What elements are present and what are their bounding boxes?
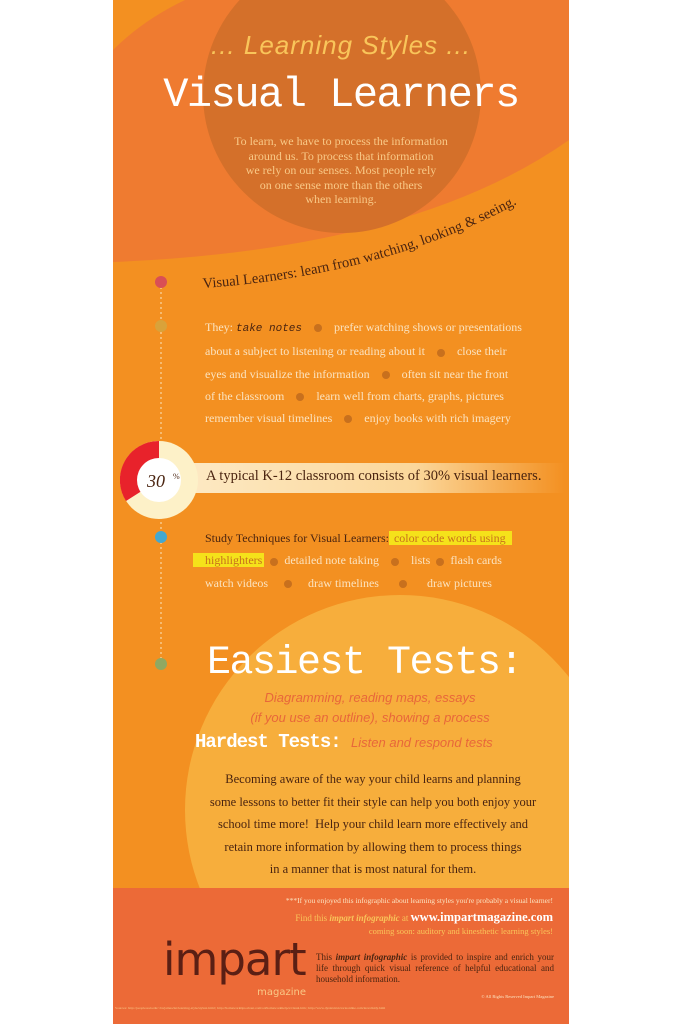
study techniques: watch videos draw timelines draw pictures xyxy=(205,576,492,590)
study techniques xyxy=(193,531,512,590)
list: they xyxy=(205,320,522,425)
text: © All Rights Reserved Impart Magazine xyxy=(481,994,554,999)
text: coming soon: auditory and kinesthetic learning styles! xyxy=(369,926,553,936)
list: they: of the classroom learn well from charts, graphs, pictures xyxy=(205,389,504,403)
donut 30%: 30 xyxy=(146,471,165,491)
easiest tests text: (if you use an outline), showing a process xyxy=(250,710,490,725)
heading: Easiest Tests: Easiest Tests: xyxy=(207,641,522,686)
logo: impart magazine: impart xyxy=(163,933,306,986)
closing paragraph: retain more information by allowing them to process things xyxy=(224,840,522,854)
intro text xyxy=(234,134,448,206)
list: they: eyes and visualize the information often sit near the front xyxy=(205,367,508,381)
logo: impart magazine: magazine xyxy=(257,987,306,998)
timeline dot gold xyxy=(155,320,167,332)
stat bar xyxy=(190,463,565,493)
background panel xyxy=(113,0,569,1024)
intro text: around us. To process that information xyxy=(249,148,433,162)
sources: Sources: http://people.usd.edu/~bwjames/tut/learning-style/stylest.html | http://homeworktips.about.com/od/homeworkhelp/a/visual.htm | http://www.dyslexiavictoriaonline.com/lesvolkidy.html xyxy=(115,1006,385,1010)
closing paragraph: school time more! Help your child learn more effectively and xyxy=(218,817,528,831)
intro text: To learn, we have to process the information xyxy=(234,134,448,148)
text: Find this impart infographic at www.impartmagazine.com xyxy=(295,910,553,924)
intro text: when learning. xyxy=(305,192,377,206)
timeline dot green xyxy=(155,658,167,670)
easiest tests text xyxy=(250,690,490,725)
title: Learning Styles: ... Learning Styles ... xyxy=(211,30,471,60)
heading: Visual Learners: Visual Learners xyxy=(163,71,519,119)
donut 30% xyxy=(120,441,198,519)
hardest tests: Hardest Tests: Listen and respond tests xyxy=(195,731,493,753)
footer description: This impart infographic is provided to inspire and enrich your life through quick visual reference of helpful educational and household information. xyxy=(316,952,554,984)
timeline dot red xyxy=(155,276,167,288)
intro text: we rely on our senses. Most people rely xyxy=(246,163,436,177)
intro text: on one sense more than the others xyxy=(260,178,422,192)
curved tagline: Visual Learners: learn from watching, looking & seeing. xyxy=(202,199,516,288)
study techniques: Study Techniques for Visual Learners: color code words using xyxy=(205,531,506,545)
text: A typical K-12 classroom consists of 30% visual learners. xyxy=(206,468,541,484)
list: they: They: take notes prefer watching shows or presentations xyxy=(205,320,522,335)
easiest tests text: Diagramming, reading maps, essays xyxy=(264,690,475,705)
list: they: remember visual timelines enjoy books with rich imagery xyxy=(205,411,511,425)
study techniques: highlighters detailed note taking lists flash cards xyxy=(205,553,502,567)
list: they: about a subject to listening or reading about it close their xyxy=(205,344,507,358)
timeline dot blue xyxy=(155,531,167,543)
closing paragraph xyxy=(210,772,536,876)
closing paragraph: Becoming aware of the way your child learns and planning xyxy=(225,772,521,786)
closing paragraph: in a manner that is most natural for them. xyxy=(270,862,476,876)
footer text: ***If you enjoyed this infographic about learning styles you're probably a visual learner! xyxy=(286,896,553,905)
closing paragraph: some lessons to better fit their style can help you both enjoy your xyxy=(210,794,536,808)
donut 30%: % xyxy=(173,472,180,481)
